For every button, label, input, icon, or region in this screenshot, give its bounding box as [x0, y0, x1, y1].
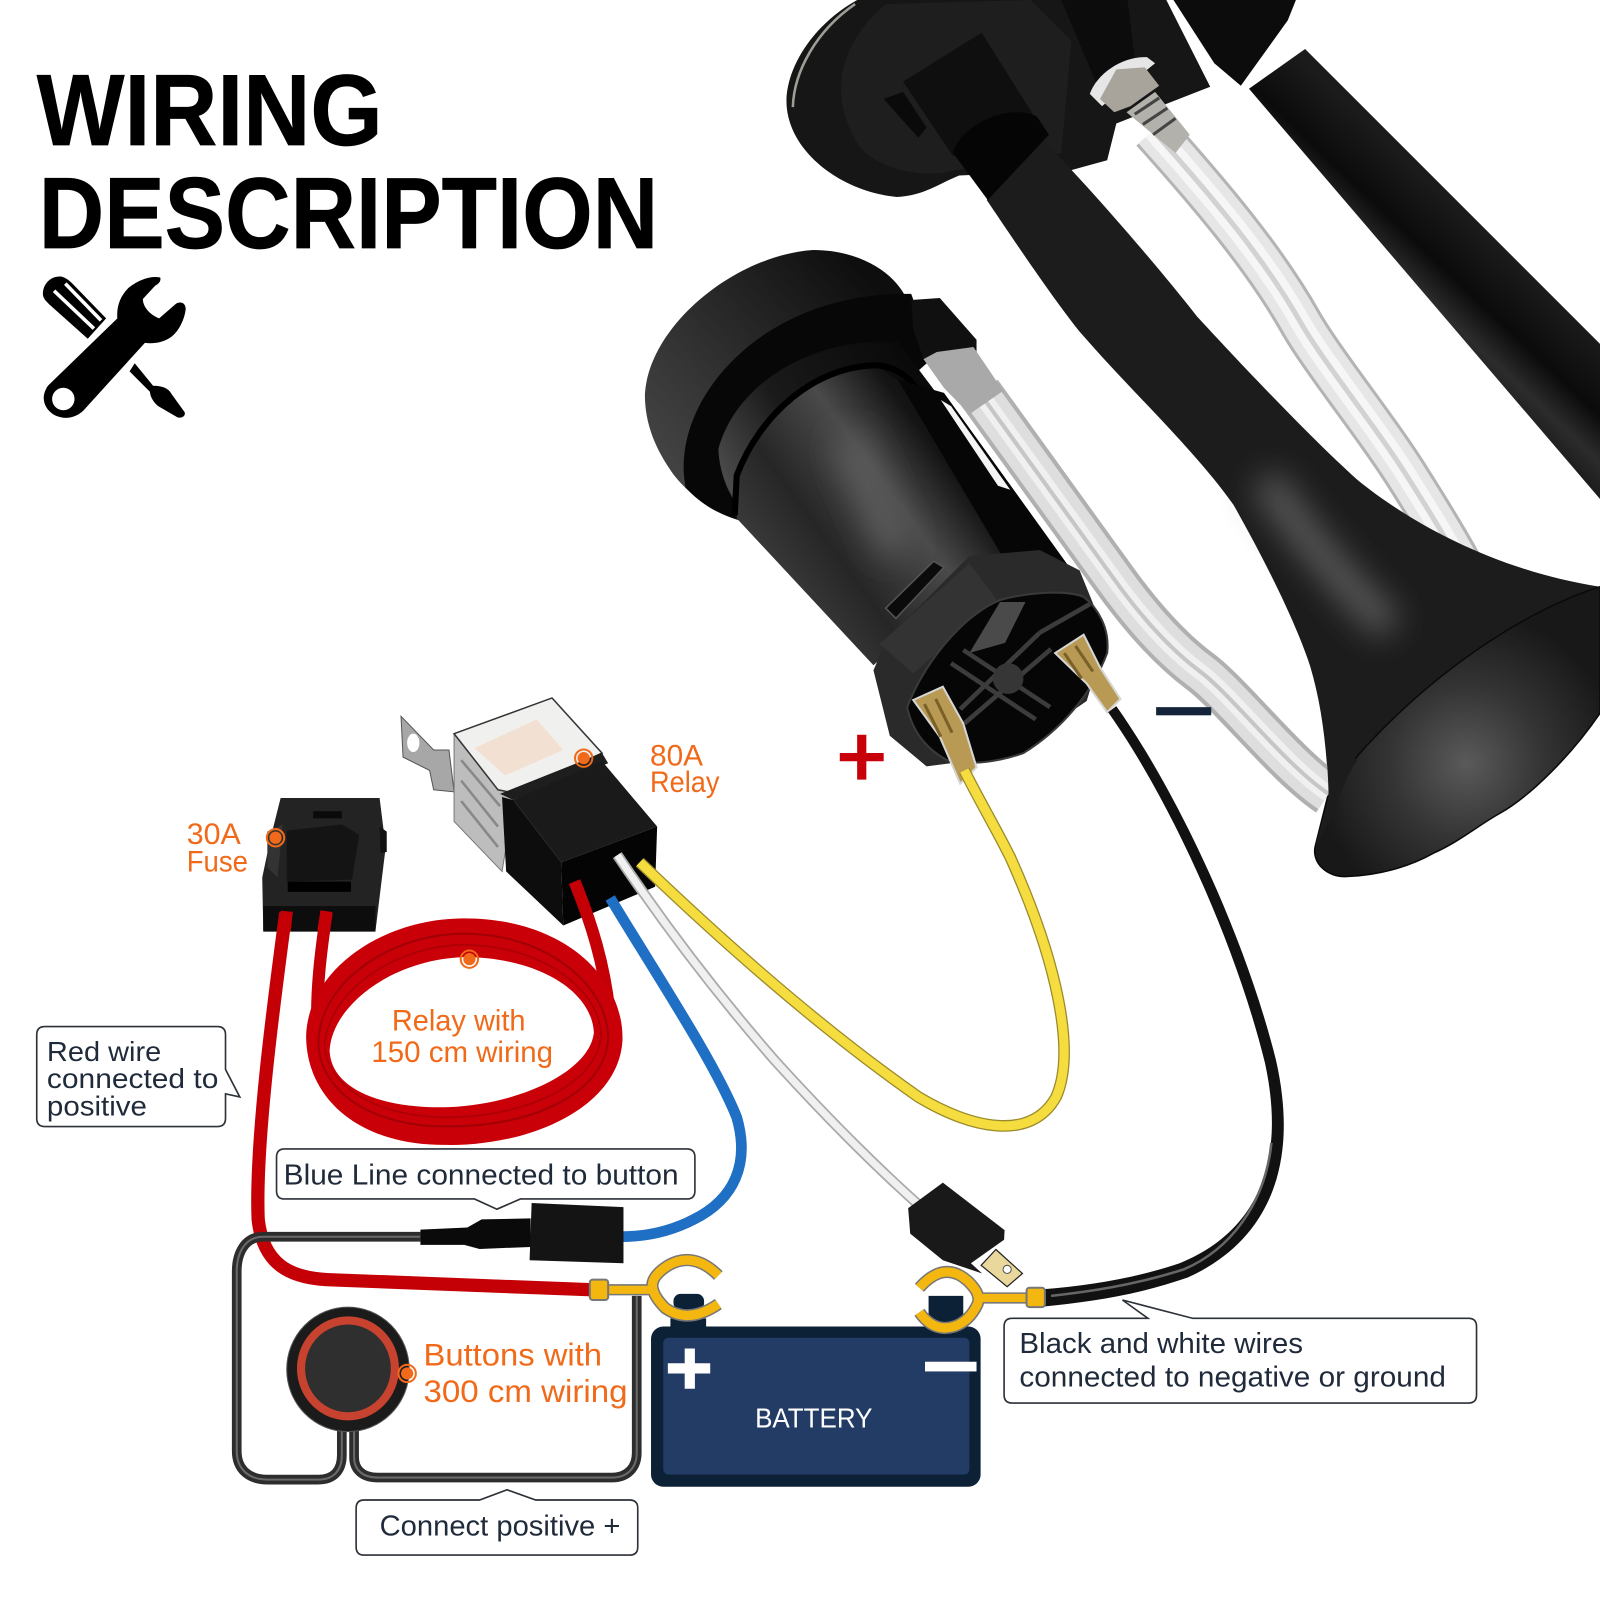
- flange raised plate: [841, 0, 1071, 174]
- battery front panel: [663, 1338, 969, 1474]
- brass nut and fitting: [1090, 57, 1190, 153]
- callout: connect positive: Connect positive +: [380, 1511, 620, 1543]
- body dark right side: [898, 380, 1069, 587]
- compressor: [645, 250, 1329, 794]
- threaded fitting: [1127, 92, 1190, 153]
- fan cone: [969, 602, 1026, 653]
- label: 30A fuse: Fuse: [187, 845, 248, 878]
- button body: [287, 1307, 409, 1432]
- plug body: [908, 1183, 1005, 1273]
- positive terminal slots: [924, 699, 952, 737]
- thread lines: [1135, 98, 1176, 135]
- block left face: [502, 797, 563, 926]
- bracket hole: [407, 734, 419, 752]
- battery: [651, 1294, 981, 1487]
- black rim: [500, 753, 608, 800]
- wire: red fuse lead to loop: [317, 913, 327, 1026]
- battery plus: [668, 1348, 710, 1389]
- relay: [401, 698, 657, 926]
- callout: black and white wires: connected to negative or ground: [1019, 1362, 1446, 1394]
- callout: blue line: Blue Line connected to button: [284, 1160, 679, 1192]
- holder base: [263, 906, 376, 932]
- push button: [287, 1307, 409, 1432]
- bell rim over hose: [1315, 730, 1357, 846]
- fuse holder: [262, 798, 387, 932]
- title: DESCRIPTION: [39, 158, 658, 270]
- flare highlight: [1265, 480, 1390, 628]
- fuse cover: [287, 824, 359, 882]
- positive ring terminal: [590, 1260, 718, 1315]
- top slot: [313, 811, 342, 818]
- wire: black button loop: [237, 1237, 637, 1480]
- callout: red wire: connected to: [47, 1063, 218, 1094]
- label: button wiring: 300 cm wiring: [423, 1373, 628, 1409]
- fuse wire entry: [285, 911, 327, 931]
- blade hole: [1003, 1265, 1011, 1273]
- battery case: [651, 1327, 981, 1487]
- label: 30A fuse: 30A: [187, 818, 241, 851]
- label: 80A relay: [650, 739, 720, 799]
- rear tube collar: [1173, 0, 1296, 86]
- end collar: [873, 550, 1106, 766]
- clear side: [454, 735, 515, 871]
- icon: wrench and screwdriver: [43, 276, 186, 418]
- positive terminal: [913, 687, 977, 784]
- compressor body: [737, 367, 1069, 665]
- holder body: [262, 798, 386, 931]
- body slot: [886, 561, 944, 618]
- wire: blue: [610, 898, 741, 1237]
- battery minus: [925, 1362, 977, 1371]
- fan interior: [907, 593, 1108, 763]
- wire: red to positive terminal: [258, 913, 592, 1290]
- wire: red relay lead: [574, 882, 609, 1010]
- body ring: [735, 365, 923, 515]
- hub: [993, 663, 1023, 694]
- side lug: [267, 824, 283, 878]
- label: button wiring: [423, 1336, 628, 1409]
- negative terminal slots: [1064, 646, 1093, 679]
- hex nut: [1100, 67, 1159, 112]
- wire: white: [617, 855, 923, 1209]
- compressor cap: [645, 250, 906, 515]
- symbol: horn plus: [840, 735, 884, 780]
- battery label: BATTERY: [755, 1403, 873, 1434]
- callout: blue line: [277, 1149, 695, 1209]
- cross beams: [951, 604, 1090, 723]
- label: relay wiring: 150 cm wiring: [371, 1036, 553, 1069]
- callout: red wire: Red wire: [47, 1036, 161, 1067]
- main horn tube and bell: [987, 134, 1600, 793]
- main tube root: [903, 33, 1037, 156]
- title: [37, 55, 658, 270]
- main tube collar: [953, 112, 1049, 200]
- label: 80A relay: 80A: [650, 739, 703, 772]
- tube: rear horn: [1249, 49, 1600, 499]
- strap clip: [911, 298, 977, 359]
- clear top: [454, 698, 602, 793]
- hose: rear clear air tube: [1153, 131, 1474, 592]
- callout: black and white wires: [1004, 1300, 1477, 1403]
- block top face: [513, 761, 657, 862]
- white wire plug: [908, 1183, 1022, 1287]
- orange labels: [187, 739, 720, 1409]
- mounting flange: [787, 0, 1210, 197]
- wire: black: [1043, 706, 1284, 1307]
- inner coil: [474, 719, 563, 776]
- crimp: [420, 1218, 531, 1249]
- inline connector: [420, 1203, 623, 1263]
- shoulder section: [718, 341, 944, 520]
- clear side ribs: [461, 760, 500, 847]
- orange marker dots: [267, 749, 592, 1382]
- label: 30A fuse: [187, 818, 248, 878]
- cap black flange: [684, 294, 934, 522]
- battery terminal posts: [670, 1296, 963, 1329]
- callout: red wire: [37, 1027, 240, 1127]
- block front face: [561, 827, 657, 926]
- metal bracket: [401, 716, 454, 792]
- flange silver rim: [793, 4, 855, 107]
- button face: [305, 1324, 391, 1412]
- symbol: horn minus: [1156, 707, 1211, 715]
- collar upper section: [880, 563, 997, 673]
- white washer: [1090, 57, 1155, 106]
- negative terminal: [1055, 635, 1120, 712]
- title: WIRING: [37, 55, 383, 167]
- bell interior: [1315, 587, 1600, 877]
- flange rib: [884, 92, 927, 138]
- white sliver beside hose: [941, 400, 1010, 490]
- hose inlet: [923, 347, 1003, 414]
- right clip: [380, 827, 387, 853]
- wire: yellow: [640, 770, 1064, 1126]
- centre tube stub: [1061, 0, 1135, 92]
- callout: red wire: positive: [47, 1090, 147, 1121]
- horn assembly: [645, 0, 1600, 877]
- callout: black and white wires: Black and white wires: [1019, 1328, 1303, 1360]
- wire: red coil: [306, 918, 623, 1145]
- red ring: [297, 1316, 399, 1420]
- gold blade: [981, 1249, 1022, 1287]
- label: button wiring: Buttons with: [423, 1336, 602, 1372]
- negative ring terminal: [919, 1272, 1045, 1328]
- body highlight: [847, 439, 898, 551]
- battery knob positive: [673, 1294, 704, 1310]
- cover slot: [288, 882, 351, 892]
- label: relay wiring: [371, 1005, 553, 1069]
- callout: connect positive: [356, 1490, 638, 1555]
- hose: front clear air tube: [980, 393, 1329, 794]
- label: 80A relay: Relay: [650, 766, 720, 799]
- label: relay wiring: Relay with: [392, 1005, 526, 1038]
- connector block: [530, 1203, 623, 1263]
